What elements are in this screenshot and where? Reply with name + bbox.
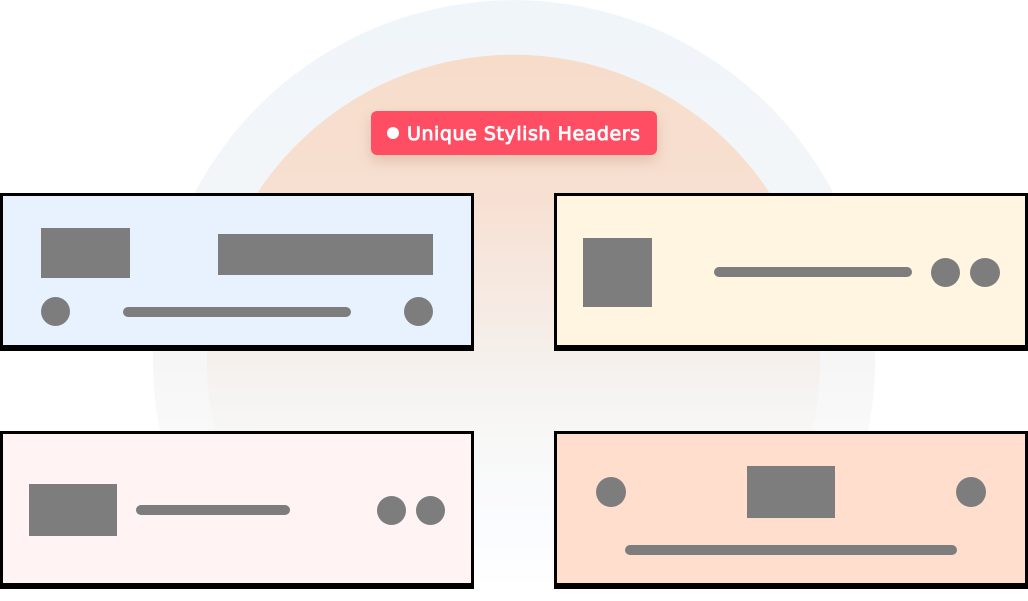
circle left	[41, 297, 70, 326]
panel: top right yellow card	[554, 193, 1028, 351]
image placeholder	[28, 484, 117, 536]
panel: bottom right peach card	[554, 431, 1028, 589]
badge dot	[387, 127, 399, 139]
circle right	[404, 297, 433, 326]
image placeholder right	[218, 234, 433, 275]
circle one	[931, 258, 960, 287]
text line	[123, 307, 351, 317]
circle left	[596, 477, 626, 507]
text line	[714, 267, 912, 277]
text line	[625, 545, 957, 555]
image placeholder left	[41, 228, 130, 278]
image placeholder	[747, 466, 835, 518]
panel: bottom left pink card	[0, 431, 474, 589]
circle two	[970, 258, 1000, 287]
circle two	[416, 496, 445, 525]
header badge	[371, 111, 657, 155]
circle one	[377, 496, 406, 525]
text line	[136, 505, 290, 515]
badge label: Unique Stylish Headers	[407, 123, 641, 145]
panel: top left blue card	[0, 193, 474, 351]
circle right	[956, 477, 986, 507]
image placeholder	[582, 238, 652, 307]
